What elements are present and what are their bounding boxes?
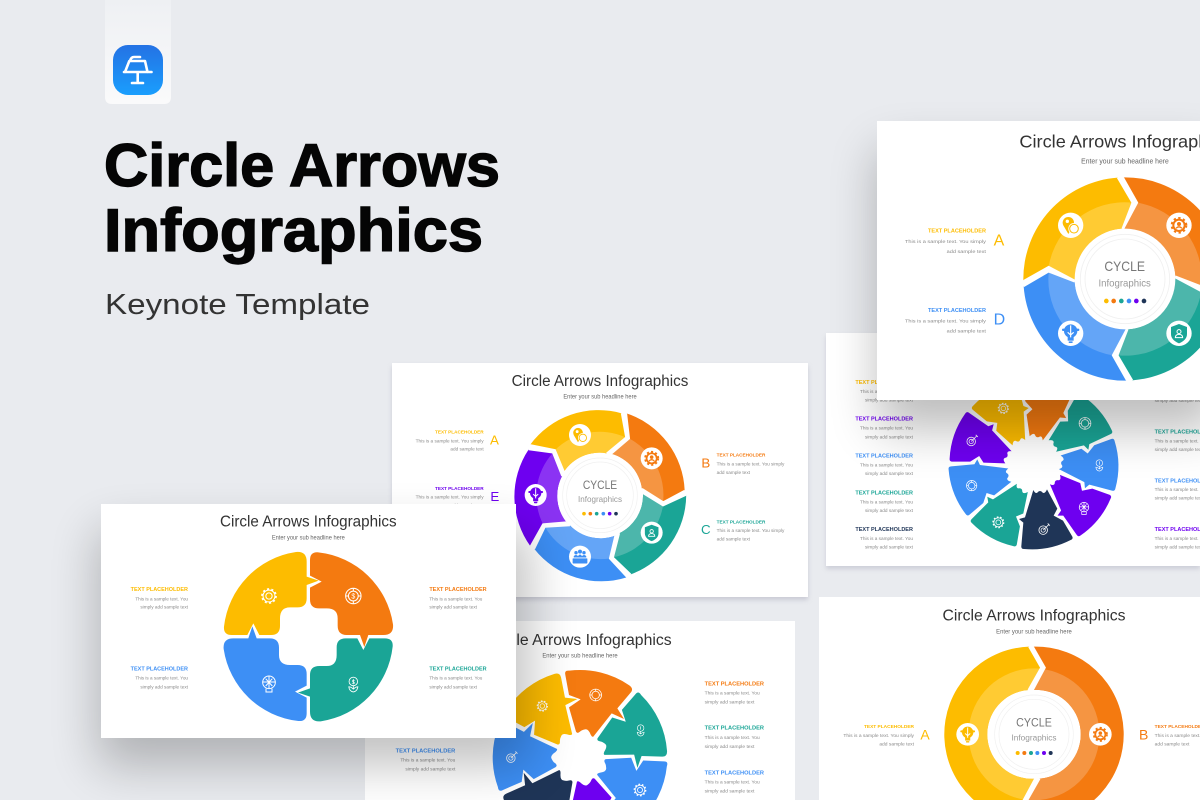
label D: TEXT PLACEHOLDER (928, 308, 987, 314)
label E: TEXT PLACEHOLDER (435, 486, 484, 492)
right labels: simply add sample text (705, 744, 755, 749)
label B: This is a sample text. You simply (717, 462, 785, 467)
label: teal: simply add sample text (429, 684, 478, 689)
label A: A (490, 432, 499, 447)
label A: add sample text (879, 742, 915, 747)
label D: add sample text (947, 328, 987, 334)
right labels (705, 681, 764, 794)
panel: four-step cycle slide (877, 121, 1200, 430)
right labels: simply add sample text (1155, 447, 1200, 452)
panel: five-step cycle slide (392, 363, 808, 605)
label: blue: TEXT PLACEHOLDER (131, 667, 188, 673)
left labels: TEXT PLACEHOLDER (855, 490, 913, 496)
centre badge (990, 690, 1078, 779)
left label (396, 748, 456, 771)
centre badge: CYCLE (1016, 716, 1052, 730)
label A: add sample text (947, 249, 987, 255)
icon: keynote app (113, 45, 163, 95)
slide subtitle: Enter your sub headline here (272, 534, 345, 541)
chart: five arrow wheel (497, 402, 707, 605)
label: blue (131, 667, 189, 689)
chart: seven arrow wheel (483, 662, 681, 800)
right labels (1155, 398, 1200, 550)
label B: B (701, 456, 710, 471)
label C: add sample text (717, 536, 751, 541)
label B (701, 453, 785, 475)
right labels: This is a sample text. You (705, 735, 760, 740)
main heading: Infographics (104, 197, 483, 264)
left label: TEXT PLACEHOLDER (396, 748, 455, 754)
right labels: simply add sample text (1155, 398, 1200, 403)
label: yellow: This is a sample text. You (135, 596, 189, 601)
left labels: TEXT PLACEHOLDER (855, 527, 913, 533)
left labels: simply add sample text (865, 545, 914, 550)
right labels: This is a sample text. You (705, 780, 760, 785)
left labels: This is a sample text. You (860, 463, 914, 468)
label E: E (490, 489, 499, 504)
label A: A (920, 726, 930, 742)
slide title: Circle Arrows Infographics (488, 632, 672, 649)
slide title: Circle Arrows Infographics (220, 514, 397, 531)
label: teal: This is a sample text. You (429, 676, 483, 681)
label: orange: simply add sample text (429, 605, 478, 610)
label B: B (1139, 726, 1148, 742)
label B (1139, 724, 1200, 747)
label B: add sample text (1155, 742, 1190, 747)
label: blue: simply add sample text (140, 684, 189, 689)
right labels: TEXT PLACEHOLDER (705, 681, 764, 687)
right labels: simply add sample text (1155, 545, 1200, 550)
right labels: This is a sample text. You (705, 690, 760, 695)
label D: This is a sample text. You simply (905, 318, 987, 324)
label C (701, 519, 785, 541)
label A: This is a sample text. You simply (905, 239, 987, 245)
label D (905, 308, 1005, 334)
left labels: TEXT PLACEHOLDER (855, 453, 913, 459)
left labels: This is a sample text. You (860, 389, 914, 394)
right labels: simply add sample text (1155, 496, 1200, 501)
left labels: This is a sample text. You (860, 499, 914, 504)
right labels: TEXT PLACEHOLDER (705, 726, 764, 732)
label C: TEXT PLACEHOLDER (717, 519, 766, 525)
label E: This is a sample text. You simply (416, 495, 485, 500)
slide subtitle: Enter your sub headline here (996, 629, 1072, 636)
right labels: simply add sample text (705, 699, 755, 704)
main heading: Circle Arrows (104, 132, 500, 199)
subheading: Keynote Template (105, 289, 370, 321)
slide title: Circle Arrows Infographics (942, 607, 1126, 624)
label A: This is a sample text. You simply (416, 438, 485, 443)
label A: This is a sample text. You simply (843, 733, 915, 738)
label: orange (429, 587, 487, 610)
label A: add sample text (450, 447, 485, 452)
centre badge: Infographics (578, 494, 622, 504)
chart: nine arrow wheel (941, 371, 1124, 555)
label A: A (994, 232, 1005, 249)
slide subtitle: Enter your sub headline here (542, 653, 618, 660)
chart: two arrow ring (944, 647, 1124, 800)
label: yellow: simply add sample text (140, 605, 189, 610)
slide title: Circle Arrows Infographics (512, 373, 689, 390)
label A (843, 724, 930, 747)
label C: C (701, 522, 711, 537)
left labels: This is a sample text. You (860, 536, 914, 541)
label A: TEXT PLACEHOLDER (928, 229, 987, 235)
right labels: simply add sample text (705, 789, 755, 794)
label A: TEXT PLACEHOLDER (435, 429, 484, 435)
label A (905, 229, 1005, 255)
label: orange: TEXT PLACEHOLDER (429, 587, 487, 593)
label A: TEXT PLACEHOLDER (864, 724, 914, 730)
keynote tab with app icon (105, 0, 171, 104)
slide subtitle: Enter your sub headline here (1081, 158, 1169, 165)
main heading (104, 132, 500, 264)
chart: four puzzle arrows: $ (352, 680, 356, 686)
panel: four-step puzzle slide (98, 504, 530, 766)
label C: This is a sample text. You simply (717, 528, 785, 533)
panel: two-step cycle slide (819, 597, 1200, 800)
panel: seven-step cycle slide (365, 621, 795, 800)
label E (416, 486, 499, 508)
left labels (855, 380, 914, 550)
centre badge: CYCLE (1104, 258, 1145, 274)
label: teal (429, 667, 487, 689)
left labels: TEXT PLACEHOLDER (855, 417, 913, 423)
label B: TEXT PLACEHOLDER (717, 453, 766, 459)
left labels: simply add sample text (865, 508, 914, 513)
label: blue: This is a sample text. You (135, 676, 189, 681)
centre badge (558, 454, 642, 537)
label A (416, 429, 499, 452)
label D: D (994, 312, 1005, 329)
left labels: simply add sample text (865, 434, 914, 439)
left labels: simply add sample text (865, 471, 914, 476)
centre badge (1075, 229, 1175, 329)
left label: This is a sample text. You (400, 758, 456, 763)
slide subtitle: Enter your sub headline here (563, 394, 637, 401)
label B: add sample text (717, 470, 751, 475)
chart: four puzzle arrows (224, 552, 393, 721)
label: yellow (131, 587, 189, 610)
label E: add sample text (450, 503, 485, 508)
left labels: This is a sample text. You (860, 426, 914, 431)
panel: nine-step cycle slide (826, 333, 1200, 569)
chart: four arrow wheel (1023, 177, 1200, 381)
centre badge: Infographics (1011, 732, 1056, 742)
left label: simply add sample text (405, 766, 456, 771)
centre badge: CYCLE (583, 478, 617, 492)
label: orange: This is a sample text. You (429, 596, 483, 601)
label: yellow: TEXT PLACEHOLDER (131, 587, 188, 593)
label: teal: TEXT PLACEHOLDER (429, 667, 487, 673)
left labels: simply add sample text (865, 398, 914, 403)
centre badge: Infographics (1098, 279, 1151, 290)
left labels: TEXT PLACEHOLDER (855, 380, 913, 386)
right labels: TEXT PLACEHOLDER (705, 770, 764, 776)
chart: four puzzle arrows: $ (351, 594, 355, 601)
